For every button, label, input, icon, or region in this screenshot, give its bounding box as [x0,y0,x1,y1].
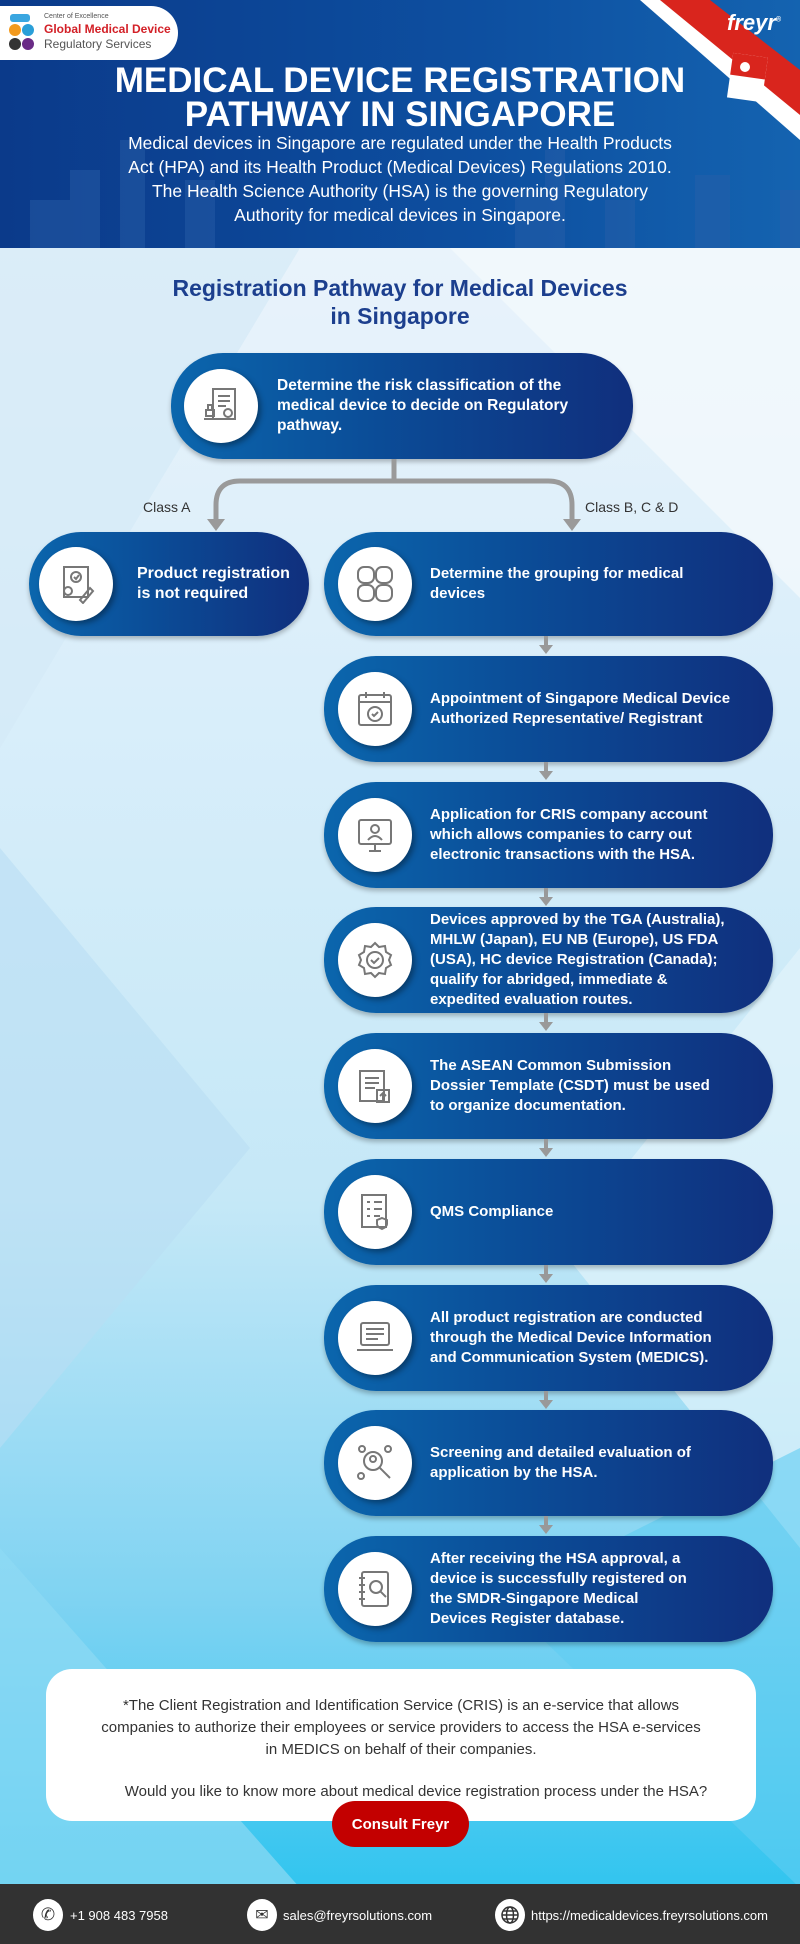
icon: laptop system [338,1301,412,1375]
footer [0,1884,800,1944]
arrow [539,1516,553,1534]
step 9: Devices Register database. [430,1610,624,1627]
intro text [128,133,672,225]
icon: register notebook [338,1552,412,1626]
step 6 [324,1159,773,1265]
left box: not required: is not required [137,585,248,602]
footnote card: in MEDICS on behalf of their companies. [266,1741,536,1758]
step 5: Dossier Template (CSDT) must be used [430,1077,710,1094]
step 9: device is successfully registered on [430,1570,687,1587]
step 9 [324,1536,773,1642]
intro text: The Health Science Authority (HSA) is the governing Regulatory [152,181,648,201]
icon: certificate [39,547,113,621]
arrow [539,1013,553,1031]
step 2 [324,656,773,762]
footnote card: Would you like to know more about medical device registration process under the HSA? [125,1783,707,1800]
phone: +1 908 483 7958 [70,1908,168,1922]
step 8 [324,1410,773,1516]
intro text: Authority for medical devices in Singapore. [234,205,566,225]
icon: calendar [338,672,412,746]
step 4: qualify for abridged, immediate & [430,971,668,988]
connector arrows [207,459,581,531]
step 1 [324,532,773,636]
header [0,0,800,248]
website: https://medicaldevices.freyrsolutions.com [531,1908,768,1922]
label: Class B, C & D: Class B, C & D [585,499,678,515]
arrow [539,1139,553,1157]
step 4 [324,907,773,1013]
step 8: Screening and detailed evaluation of [430,1444,691,1461]
logo pill: Global Medical Device [44,22,171,36]
step 1: devices [430,585,485,602]
title: PATHWAY IN SINGAPORE [185,95,615,134]
step 2: Authorized Representative/ Registrant [430,710,703,727]
button: Consult Freyr [332,1801,469,1847]
website [495,1899,768,1931]
arrow [539,636,553,654]
email: ✉ [255,1907,269,1924]
step 1: Determine the grouping for medical [430,565,683,582]
icon: badge check [338,923,412,997]
arrow [539,1391,553,1409]
step 4: expedited evaluation routes. [430,991,633,1008]
left box: not required [29,532,309,636]
arrow [539,1265,553,1283]
step 9: After receiving the HSA approval, a [430,1550,680,1567]
left box: not required: Product registration [137,565,290,582]
top box: risk classification: medical device to decide on Regulatory [277,397,568,414]
step 4: (USA), HC device Registration (Canada); [430,951,718,968]
arrow [539,762,553,780]
icon: checklist [338,1175,412,1249]
section heading [172,275,628,329]
icon: stamp document [184,369,258,443]
intro text: Medical devices in Singapore are regulated under the Health Products [128,133,672,153]
icon: people search [338,1426,412,1500]
step 2: Appointment of Singapore Medical Device [430,690,730,707]
step 3 [324,782,773,888]
step 4: Devices approved by the TGA (Australia), [430,911,725,928]
top box: risk classification [171,353,633,459]
icon: grouping [338,547,412,621]
step 7: All product registration are conducted [430,1309,703,1326]
label: Class A: Class A [143,499,190,515]
email [247,1899,432,1931]
intro text: Act (HPA) and its Health Product (Medical Devices) Regulations 2010. [128,157,672,177]
top box: risk classification: pathway. [277,417,342,434]
step 5: The ASEAN Common Submission [430,1057,671,1074]
title: MEDICAL DEVICE REGISTRATION [115,61,685,100]
step 9: the SMDR-Singapore Medical [430,1590,638,1607]
email: sales@freyrsolutions.com [283,1908,432,1922]
top box: risk classification: Determine the risk classification of the [277,377,561,394]
step 7: through the Medical Device Information [430,1329,712,1346]
step 8: application by the HSA. [430,1464,598,1481]
phone: ✆ [41,1905,55,1924]
phone [33,1899,168,1931]
step 5 [324,1033,773,1139]
step 3: which allows companies to carry out [430,826,692,843]
step 4: MHLW (Japan), EU NB (Europe), US FDA [430,931,718,948]
logo pill [0,6,178,60]
logo pill: Regulatory Services [44,37,151,51]
section heading: Registration Pathway for Medical Devices [172,275,628,301]
city skyline [30,140,800,248]
step 7 [324,1285,773,1391]
step 3: electronic transactions with the HSA. [430,846,695,863]
title [115,61,685,134]
step 3: Application for CRIS company account [430,806,708,823]
arrow [539,888,553,906]
step 6: QMS Compliance [430,1203,553,1220]
icon: computer account [338,798,412,872]
step 5: to organize documentation. [430,1097,626,1114]
icon: document upload [338,1049,412,1123]
footnote card [46,1669,756,1821]
freyr logo: freyr® [727,10,781,35]
footnote card: companies to authorize their employees or service providers to access the HSA e-services [101,1719,701,1736]
logo pill: Center of Excellence [44,13,109,20]
step 7: and Communication System (MEDICS). [430,1349,708,1366]
footnote card: *The Client Registration and Identification Service (CRIS) is an e-service that allows [123,1697,679,1714]
section heading: in Singapore [330,303,470,329]
button: Consult Freyr: Consult Freyr [352,1816,449,1832]
flag ribbon [640,0,800,140]
